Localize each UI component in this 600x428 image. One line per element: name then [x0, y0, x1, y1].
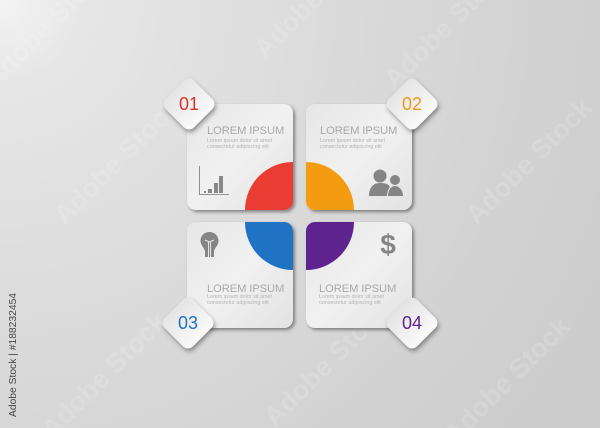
badge 01 — [162, 79, 218, 135]
panel: card 02 — [306, 104, 416, 214]
icon: dollar sign: $ — [380, 229, 396, 260]
badge 03: 03 — [178, 313, 198, 333]
heading 04: LOREM IPSUM — [319, 283, 396, 295]
body text 01: consectetur adipiscing elit — [207, 144, 269, 150]
body text 03: consectetur adipiscing elit — [207, 300, 269, 306]
credit: vertical stock id: Adobe Stock | #188232454 — [8, 293, 19, 417]
body text 03: Lorem ipsum dolor sit amet — [207, 294, 272, 300]
body text 04: consectetur adipiscing elit — [319, 300, 381, 306]
badge 02 — [386, 78, 442, 134]
blue quarter circle — [245, 174, 341, 270]
orange quarter circle — [258, 162, 354, 258]
badge 01: 01 — [179, 94, 199, 114]
heading 03: LOREM IPSUM — [207, 283, 284, 295]
panel: card 01 — [187, 104, 297, 214]
watermark: Adobe Stock repeated: Adobe Stock — [460, 92, 598, 230]
body text 02 — [320, 138, 385, 150]
purple quarter circle — [258, 174, 354, 270]
body text 01: Lorem ipsum dolor sit amet — [207, 138, 272, 144]
body text 02: Lorem ipsum dolor sit amet — [320, 138, 385, 144]
body text 02: consectetur adipiscing elit — [320, 144, 382, 150]
body text 04 — [319, 294, 384, 306]
panel: card 04 — [306, 222, 416, 332]
body text 01 — [207, 138, 272, 150]
watermark: Adobe Stock repeated: Adobe Stock — [48, 92, 186, 230]
badge 04 — [386, 298, 441, 354]
icon: bar chart — [199, 166, 229, 195]
badge 03 — [162, 298, 218, 354]
badge 04: 04 — [402, 313, 422, 333]
badge 02: 02 — [402, 94, 422, 114]
panel: card 03 — [187, 222, 297, 332]
icon: people — [369, 170, 403, 196]
heading 01: LOREM IPSUM — [207, 125, 284, 137]
red quarter circle — [245, 162, 341, 258]
body text 04: Lorem ipsum dolor sit amet — [319, 294, 384, 300]
icon: light bulb — [200, 232, 218, 257]
heading 02: LOREM IPSUM — [320, 125, 397, 137]
body text 03 — [207, 294, 272, 306]
